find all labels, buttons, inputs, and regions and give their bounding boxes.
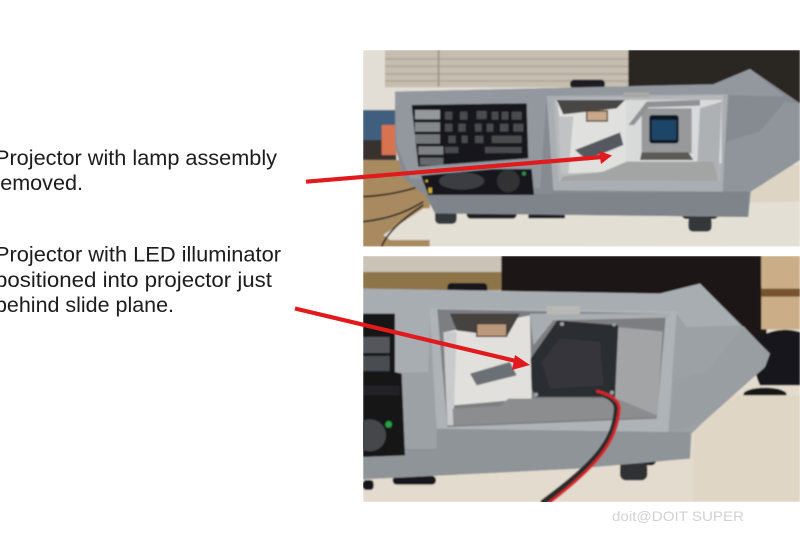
watermark: doit@DOIT SUPER	[612, 508, 744, 524]
lamp bay opening	[547, 92, 728, 192]
text block: LED illuminator positioned: positioned into projector just	[0, 269, 272, 292]
text block: lamp assembly removed	[0, 147, 278, 195]
photo: projector with lamp assembly removed	[363, 50, 800, 247]
power cable	[543, 391, 619, 502]
text block: LED illuminator positioned: Projector with LED illuminator	[0, 244, 281, 266]
background: blue object and table	[363, 110, 800, 247]
text block: LED illuminator positioned: behind slide plane.	[0, 294, 174, 317]
background: window and cabinet	[363, 256, 800, 397]
slide gate	[640, 108, 693, 160]
text block: lamp assembly removed: Projector with lamp assembly	[0, 147, 278, 170]
projector feet	[363, 283, 656, 490]
connector panel	[421, 169, 534, 195]
background: window blinds	[385, 50, 628, 87]
projector feet	[435, 80, 718, 232]
rear vent and connector panel	[363, 312, 406, 458]
photo: projector with LED illuminator installed	[354, 256, 800, 502]
arrow: to LED illuminator	[295, 308, 530, 370]
background: dark cabinet	[628, 50, 800, 87]
projector body	[363, 284, 770, 479]
rear vent grille	[412, 103, 528, 167]
LED illuminator	[531, 320, 618, 397]
arrow: to lamp bay	[306, 151, 612, 182]
text block: LED illuminator positioned	[0, 244, 281, 317]
projector body	[395, 69, 800, 217]
lamp bay opening	[429, 306, 677, 432]
